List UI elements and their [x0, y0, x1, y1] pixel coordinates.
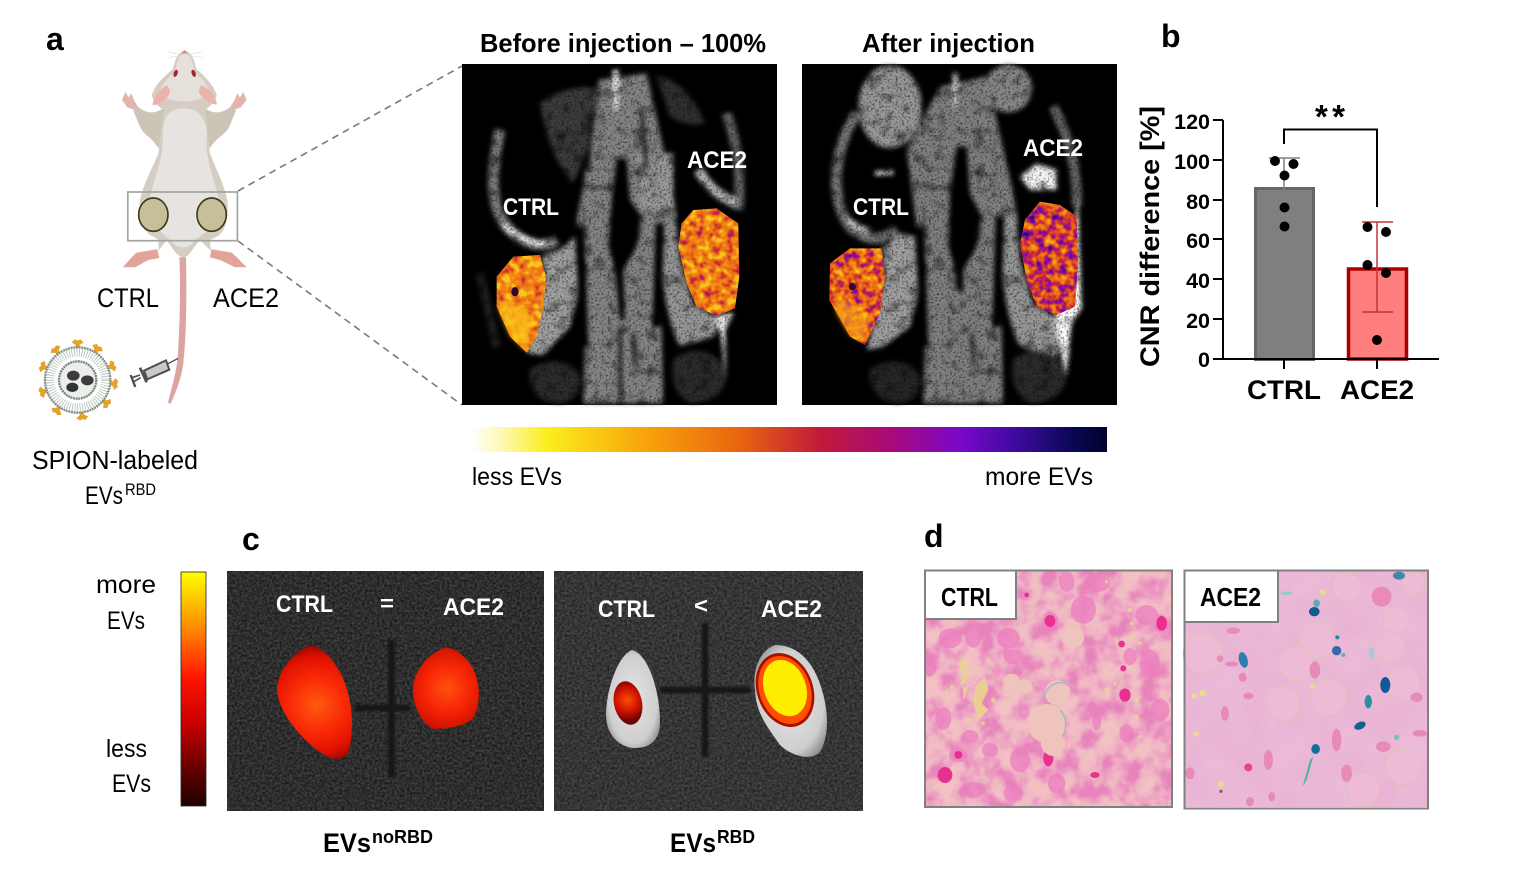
y axis title: CNR difference [%] [1135, 106, 1165, 367]
y tick labels: 80 [1186, 190, 1210, 214]
x label CTRL: CTRL [1247, 375, 1321, 405]
significance stars: ** [1315, 98, 1345, 135]
colour scale [181, 572, 206, 806]
label ACE2: ACE2 [443, 594, 504, 621]
label CTRL on MRI: CTRL [503, 194, 559, 221]
image EVs RBD [554, 571, 863, 811]
zoom guide lines [238, 66, 462, 405]
caption EVs noRBD [323, 827, 433, 858]
label more EVs: EVs [107, 607, 145, 635]
label less EVs: EVs [112, 770, 151, 798]
bar ACE2 [1348, 269, 1406, 359]
y tick labels: 40 [1186, 269, 1210, 293]
label box CTRL: CTRL [941, 582, 998, 612]
caption EVs RBD: EVs [670, 828, 716, 858]
label more EVs [96, 571, 156, 635]
zoom box [128, 192, 237, 241]
label ACE2 on MRI: ACE2 [1023, 135, 1083, 162]
y tick labels: 120 [1174, 110, 1210, 134]
caption EVs RBD [670, 827, 755, 858]
caption EVs RBD: RBD [717, 827, 755, 847]
panel letter c: c [242, 521, 260, 557]
y tick labels: 60 [1186, 229, 1210, 253]
label ACE2: ACE2 [213, 283, 279, 313]
label box ACE2: ACE2 [1200, 582, 1261, 612]
error bar CTRL [1269, 158, 1300, 215]
label CTRL: CTRL [276, 591, 333, 618]
histology CTRL [924, 570, 1172, 807]
icon: SPION-labeled extracellular vesicle [37, 339, 119, 421]
label box CTRL [925, 570, 1016, 619]
label CTRL on MRI: CTRL [853, 194, 909, 221]
MRI image before injection [462, 64, 777, 405]
EVs RBD label: EVs [85, 482, 123, 510]
colour scale for MRI [471, 427, 1107, 491]
label more EVs: more [96, 571, 156, 599]
caption EVs noRBD: noRBD [372, 827, 433, 847]
histology ACE2 [1183, 570, 1428, 808]
y tick labels [1174, 110, 1210, 372]
y tick labels: 0 [1198, 348, 1210, 372]
y tick labels: 20 [1186, 309, 1210, 333]
data points ACE2 [1362, 222, 1391, 345]
icon: mouse with tumours [122, 50, 247, 404]
EVs RBD label: RBD [125, 481, 156, 499]
EVs RBD label [85, 481, 156, 510]
label more EVs: more EVs [985, 463, 1093, 491]
less-than sign: < [694, 593, 708, 618]
y tick labels: 100 [1174, 150, 1210, 174]
label CTRL: CTRL [97, 283, 159, 313]
label less EVs [106, 735, 151, 798]
label ACE2: ACE2 [761, 596, 822, 623]
panel letter b: b [1161, 18, 1181, 54]
heading: after injection: After injection [862, 28, 1035, 58]
panel c: ex vivo fluorescence [96, 521, 863, 858]
data points CTRL [1270, 156, 1298, 232]
label less EVs: less [106, 735, 147, 763]
caption EVs noRBD: EVs [323, 828, 371, 858]
label CTRL: CTRL [598, 596, 655, 623]
significance bracket [1284, 130, 1377, 207]
panel a: mouse schematic [32, 21, 462, 510]
label ACE2 on MRI: ACE2 [687, 147, 747, 174]
label less EVs: less EVs [472, 463, 562, 491]
bar CTRL [1256, 188, 1314, 360]
equals sign: = [380, 591, 394, 616]
MRI image after injection [802, 64, 1117, 405]
heading: before injection: Before injection – 100% [480, 28, 766, 58]
x label ACE2: ACE2 [1340, 375, 1414, 405]
error bar ACE2 [1362, 222, 1393, 312]
label box ACE2 [1184, 570, 1278, 622]
axes [1213, 120, 1439, 369]
panel b: bar chart [1135, 18, 1439, 405]
panel letter d: d [924, 518, 944, 554]
panel d: histology [924, 518, 1428, 808]
injected material label: SPION-labeled [32, 447, 198, 475]
panel letter a: a [46, 21, 64, 57]
image EVs noRBD [227, 571, 544, 811]
icon: syringe [131, 358, 178, 387]
